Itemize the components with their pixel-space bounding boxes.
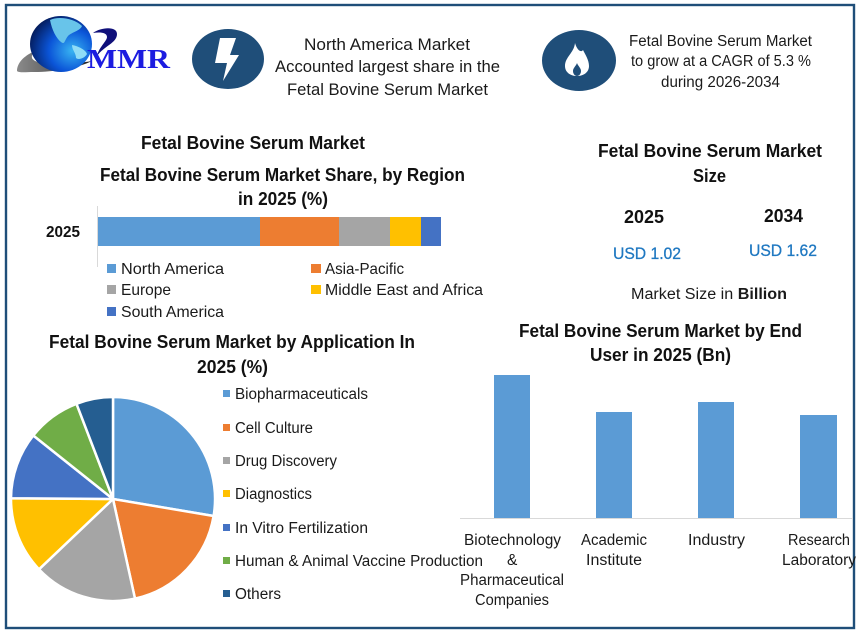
callout: CAGR: to grow at a CAGR of 5.3 % (631, 53, 811, 70)
icon: dark blue number two swoosh (93, 28, 117, 56)
legend: region share (107, 261, 483, 321)
legend: application share: Others (235, 586, 281, 603)
heading: by application: Fetal Bovine Serum Market by Application In (49, 332, 415, 352)
axis label: biotechnology (460, 532, 564, 609)
legend: application share: In Vitro Fertilization (235, 520, 368, 537)
note: market size unit: Market Size in Billion (631, 286, 787, 303)
stat: 2034 market size: 2034 (764, 206, 803, 226)
stacked bar chart: region share (46, 206, 441, 267)
heading: by application: 2025 (%) (197, 357, 268, 377)
legend: application share: Cell Culture (235, 420, 313, 437)
heading: market size (598, 141, 822, 186)
stat: 2034 market size (749, 206, 817, 260)
heading: by application (49, 332, 415, 377)
stat: 2034 market size: USD 1.62 (749, 241, 817, 260)
callout: CAGR: Fetal Bovine Serum Market (629, 33, 813, 50)
axis label: research laboratory: Research (788, 532, 850, 549)
axis label: academic institute (581, 532, 647, 569)
heading: market size: Size (693, 166, 726, 186)
stat: 2025 market size: 2025 (624, 207, 664, 227)
stat: 2025 market size: USD 1.02 (613, 244, 681, 263)
callout: North America share: North America Market (304, 36, 470, 54)
axis label: industry: Industry (688, 532, 745, 549)
axis label: academic institute: Academic (581, 532, 647, 549)
legend: region share: Asia-Pacific (325, 261, 404, 278)
legend: application share (223, 386, 483, 603)
axis label 2025: 2025 (46, 224, 80, 241)
heading: main title: Fetal Bovine Serum Market (141, 133, 365, 153)
icon: globe (30, 16, 92, 72)
axis label: academic institute: Institute (586, 552, 642, 569)
legend: region share: Middle East and Africa (325, 282, 483, 299)
bar chart: end user (460, 375, 853, 518)
pie chart: application share (11, 397, 215, 601)
legend: region share: North America (121, 261, 224, 278)
callout: CAGR: during 2026-2034 (661, 74, 780, 91)
icon: lightning bolt (192, 29, 264, 89)
logo: MMR globe (17, 16, 171, 74)
legend: application share: Biopharmaceuticals (235, 386, 368, 403)
axis label: biotechnology: Companies (475, 592, 549, 609)
heading: share by region: Fetal Bovine Serum Market Share, by Region (100, 165, 465, 185)
legend: application share: Drug Discovery (235, 453, 337, 470)
callout: CAGR (629, 33, 813, 91)
heading: by end user: User in 2025 (Bn) (590, 345, 731, 365)
icon: grey swoosh (17, 52, 92, 72)
stat: 2025 market size (613, 207, 681, 263)
callout: North America share: Fetal Bovine Serum Market (287, 81, 488, 99)
legend: application share: Human & Animal Vaccine Production (235, 553, 483, 570)
heading: market size: Fetal Bovine Serum Market (598, 141, 822, 161)
logo wordmark: MMR (87, 44, 171, 74)
axis label: research laboratory: Laboratory (782, 552, 856, 569)
legend: application share: Diagnostics (235, 486, 312, 503)
legend: region share: South America (121, 304, 224, 321)
axis label: research laboratory (782, 532, 856, 569)
callout: North America share (275, 36, 500, 99)
axis label: biotechnology: Biotechnology (464, 532, 561, 549)
heading: by end user (519, 321, 802, 365)
heading: share by region: in 2025 (%) (238, 189, 328, 209)
axis label: biotechnology: & (507, 552, 518, 569)
legend: region share: Europe (121, 282, 171, 299)
heading: share by region (100, 165, 465, 209)
heading: by end user: Fetal Bovine Serum Market by End (519, 321, 802, 341)
callout: North America share: Accounted largest share in the (275, 58, 500, 76)
icon: flame (542, 30, 616, 91)
axis label: biotechnology: Pharmaceutical (460, 572, 564, 589)
